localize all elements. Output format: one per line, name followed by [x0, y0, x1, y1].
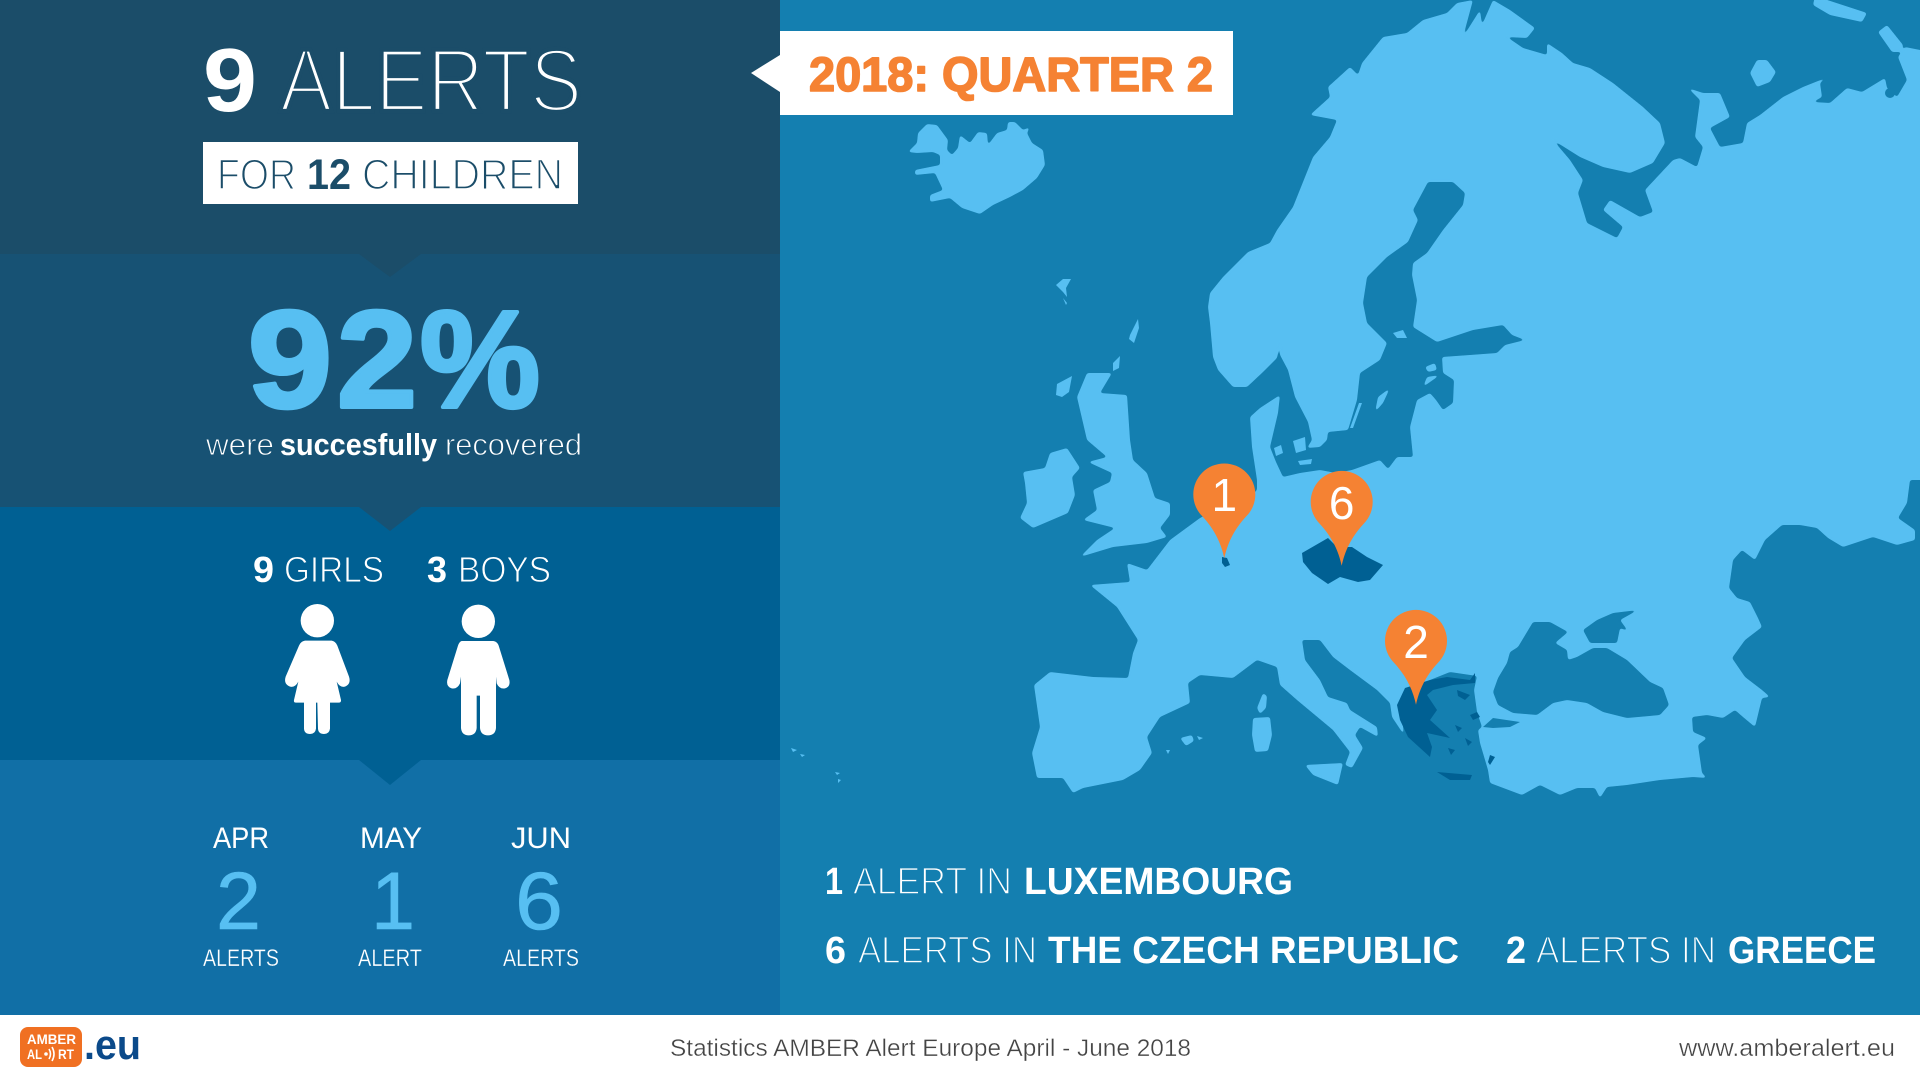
stat: may [358, 822, 422, 972]
caption: succesfully recovered: were [205, 427, 274, 462]
badge: for 12 children: CHILDREN [362, 151, 563, 199]
arrow: section pointer [359, 760, 421, 785]
stat: 92 percent: 9 [248, 283, 332, 437]
logo: AMBER Alert .eu: AMBER [27, 1032, 76, 1047]
logo: AMBER Alert .eu: .eu [84, 1021, 141, 1068]
title: 9 alerts: ALERTS [280, 30, 582, 130]
badge: for 12 children: 12 [307, 151, 351, 199]
stat: may: MAY [360, 822, 422, 855]
arrow: section pointer [359, 507, 421, 531]
text: 6 alerts in the Czech Republic: 6 [825, 930, 846, 972]
badge: for 12 children [203, 142, 578, 204]
text: 1 alert in Luxembourg [825, 861, 1293, 903]
text: 1 alert in Luxembourg: ALERT IN [853, 861, 1012, 903]
text: 6 alerts in the Czech Republic [825, 930, 1459, 972]
caption: succesfully recovered [205, 427, 582, 462]
source text: Statistics AMBER Alert Europe April - June 2018 [670, 1035, 1191, 1062]
stat: april: 2 [216, 856, 261, 947]
map pin: Czech Republic: 6 [1329, 477, 1354, 529]
water: small lake [1885, 88, 1895, 98]
heading: 2018 quarter 2 [751, 31, 1233, 115]
text: 1 alert in Luxembourg: LUXEMBOURG [1024, 861, 1293, 903]
map of Europe [791, 0, 1920, 798]
title: 9 alerts: 9 [203, 31, 257, 131]
land: Iceland [908, 122, 1045, 214]
text: 6 alerts in the Czech Republic: THE CZECH REPUBLIC [1048, 930, 1459, 972]
stat: june: ALERTS [503, 945, 579, 972]
logo: AMBER Alert .eu [20, 1021, 141, 1068]
stat: 92 percent: 2 [337, 283, 417, 437]
stat: april [203, 822, 279, 972]
panel: alerts total [0, 0, 780, 254]
label: 3 boys: 3 [427, 549, 447, 590]
panel: map background [780, 0, 1920, 1015]
land: larger islands [1180, 0, 1903, 785]
land: mainland Europe [1032, 0, 1920, 798]
stat: 92 percent [248, 283, 540, 437]
water: Sea of Marmara [1483, 718, 1520, 728]
land: Great Britain [1077, 373, 1170, 557]
land: Ireland [1020, 448, 1080, 528]
stat: 92 percent: % [420, 283, 540, 437]
text: 2 alerts in Greece [1506, 930, 1876, 972]
label: 9 girls: 9 [253, 549, 274, 590]
stat: june: JUN [511, 822, 571, 855]
icon: girl [285, 604, 350, 734]
text: 2 alerts in Greece: ALERTS IN [1536, 930, 1716, 972]
stat: april: APR [213, 822, 269, 855]
country highlight: Greece [1397, 673, 1495, 780]
arrow: section pointer [359, 254, 421, 277]
country highlight: Luxembourg [1222, 557, 1230, 567]
stat: april: ALERTS [203, 945, 279, 972]
badge: for 12 children: FOR [217, 151, 296, 199]
logo: AMBER Alert .eu: RT [58, 1047, 75, 1062]
stat: june [503, 822, 579, 972]
stat: may: ALERT [358, 945, 422, 972]
text: 6 alerts in the Czech Republic: ALERTS IN [858, 930, 1037, 972]
label: 9 girls: GIRLS [284, 549, 384, 590]
map pin: Luxembourg [1193, 463, 1255, 558]
caption: succesfully recovered: succesfully [280, 427, 438, 462]
logo: AMBER Alert .eu: AL [27, 1047, 42, 1062]
stat: june: 6 [515, 856, 563, 947]
map pin: Greece [1385, 610, 1447, 705]
icon: boy [447, 605, 510, 735]
footer bar [0, 1015, 1920, 1080]
stat: may: 1 [371, 856, 415, 947]
land: small islands [791, 279, 1407, 783]
heading: 2018 quarter 2: 2018: QUARTER 2 [809, 49, 1213, 102]
panel: alerts per month [0, 760, 780, 1015]
water: Black Sea and Azov [1493, 610, 1669, 718]
text: 2 alerts in Greece: GREECE [1728, 930, 1876, 972]
country highlight: Czech Republic [1302, 538, 1383, 584]
map pin: Greece: 2 [1403, 616, 1429, 668]
panel: girls and boys [0, 507, 780, 760]
text: 2 alerts in Greece: 2 [1506, 930, 1526, 972]
map pin: Czech Republic [1311, 471, 1373, 566]
label: 3 boys: BOYS [458, 549, 551, 590]
website: www.amberalert.eu [1678, 1035, 1895, 1062]
land masses [908, 0, 1920, 798]
panel: recovery rate [0, 254, 780, 507]
map pin: Luxembourg: 1 [1212, 469, 1237, 521]
text: 1 alert in Luxembourg: 1 [825, 861, 843, 903]
caption: succesfully recovered: recovered [445, 427, 582, 462]
